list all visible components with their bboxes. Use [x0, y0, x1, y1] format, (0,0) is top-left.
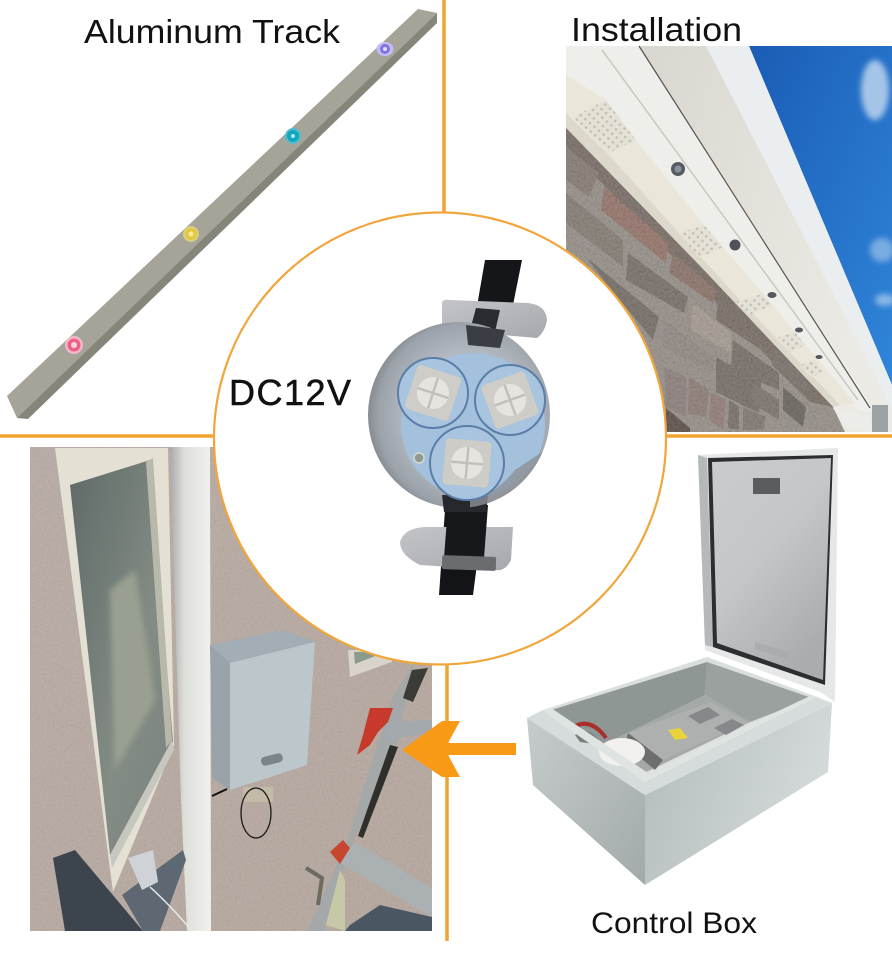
wall texture — [30, 447, 432, 931]
fascia edge highlight — [706, 46, 892, 408]
LED bottom — [430, 426, 504, 500]
panel: installation photo — [566, 46, 892, 432]
downspout — [170, 447, 211, 931]
heading: Aluminum Track: Aluminum Track — [84, 13, 341, 50]
curtain reflection — [110, 570, 155, 770]
label: DC12V: DC12V — [229, 372, 351, 413]
box interior — [543, 657, 817, 780]
window glass — [70, 460, 173, 855]
track light: yellow — [183, 226, 199, 242]
inner window rim — [146, 458, 172, 748]
brick wall — [566, 128, 845, 432]
cable through bottom tab — [444, 505, 488, 558]
LED right — [475, 365, 545, 435]
LED left — [398, 358, 468, 428]
soffit panel — [566, 75, 855, 405]
track bar — [7, 9, 437, 419]
housing — [368, 322, 550, 508]
soffit rail shadow line — [602, 50, 858, 400]
product: pixel LED node — [368, 260, 550, 595]
orange arrow — [402, 721, 516, 777]
cable top — [472, 260, 522, 335]
wall — [30, 447, 432, 931]
fascia — [638, 46, 892, 420]
panel: wall-mounted box photo — [30, 447, 432, 931]
central circle — [214, 212, 666, 664]
dark fascia line — [639, 46, 870, 408]
cable bottom — [439, 510, 484, 595]
open lid — [698, 448, 838, 702]
dark cable under housing bottom — [442, 495, 488, 512]
track light: pink — [65, 336, 83, 354]
heading: Installation: Installation — [571, 11, 742, 48]
wall outlet and cable loop — [212, 787, 273, 838]
box front rim — [543, 695, 817, 782]
panel: aluminum track — [7, 9, 437, 419]
heading: Control Box: Control Box — [591, 907, 757, 940]
cable crossing tab — [466, 308, 500, 345]
gutter end — [833, 405, 888, 432]
soffit rails — [566, 46, 874, 412]
wall box — [210, 630, 315, 790]
box body — [527, 697, 832, 885]
mount tab top — [442, 300, 547, 338]
window frame — [55, 448, 174, 892]
band on bottom cable — [442, 555, 496, 571]
mounted lights — [671, 162, 822, 359]
track light: teal — [285, 128, 301, 144]
ladder — [307, 665, 432, 931]
panel: control box — [527, 448, 838, 885]
blue board clipped to housing — [401, 353, 545, 510]
mount tab bottom — [400, 527, 513, 570]
adapter — [128, 850, 192, 931]
sky — [566, 46, 892, 432]
lower soffit strip — [566, 113, 840, 407]
track light: purple — [376, 42, 394, 56]
dark cable under housing top — [466, 325, 505, 348]
solder point — [414, 453, 424, 463]
small window — [348, 650, 392, 677]
railing — [53, 850, 186, 931]
soffit vents — [573, 100, 823, 378]
lower window rim — [110, 740, 174, 868]
brick texture — [566, 128, 845, 432]
faucet — [306, 868, 322, 905]
